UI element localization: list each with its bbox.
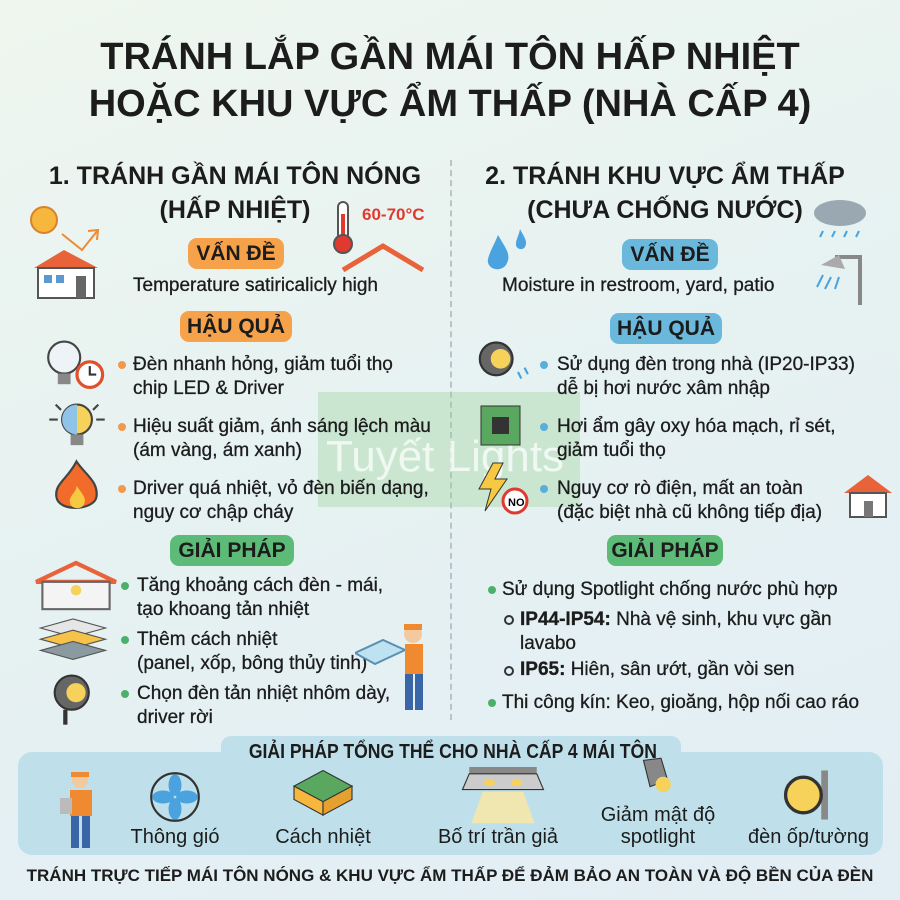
panel: right damp [478, 162, 892, 713]
item: insulation [275, 770, 371, 848]
panel heading tab [221, 736, 681, 768]
item: false ceiling: Bố trí trần giả [438, 826, 558, 848]
item: fewer spotlights: spotlight [621, 826, 695, 848]
solutions list: driver rời [137, 707, 213, 728]
consequences list [478, 341, 892, 523]
pill: hau qua: HẬU QUẢ [617, 317, 715, 340]
panel: left heat: (HẤP NHIỆT) [160, 196, 310, 224]
item: false ceiling [438, 767, 558, 848]
solutions list: IP65: Hiên, sân ướt, gần vòi sen [520, 659, 794, 680]
item: fewer spotlights [601, 758, 715, 848]
consequences list: (ám vàng, ám xanh) [133, 440, 302, 461]
pill: van de: VẤN ĐỀ [196, 242, 276, 265]
solutions list: Sử dụng Spotlight chống nước phù hợp [502, 579, 838, 600]
solutions list: lavabo [520, 633, 576, 654]
item: ventilation: Thông gió [131, 826, 219, 848]
solutions list [35, 560, 423, 728]
problem text: Moisture in restroom, yard, patio [502, 275, 774, 296]
consequences list: Nguy cơ rò điện, mất an toàn [557, 478, 803, 499]
item: fewer spotlights: Giảm mật độ [601, 804, 715, 826]
consequences list: giảm tuổi thọ [557, 440, 666, 461]
solutions list: Chọn đèn tản nhiệt nhôm dày, [137, 683, 390, 704]
pill: giai phap [170, 535, 294, 566]
consequences list [47, 340, 431, 523]
item: wall lights: đèn ốp/tường [748, 826, 869, 848]
solutions list [488, 579, 859, 713]
title: TRÁNH LẮP GẦN MÁI TÔN HẤP NHIỆT [100, 36, 800, 78]
watermark [318, 392, 580, 507]
watermark: Tuyết Lights [326, 432, 564, 481]
consequences list: Driver quá nhiệt, vỏ đèn biến dạng, [133, 478, 429, 499]
icon: water drops [488, 229, 526, 270]
consequences list: dễ bị hơi nước xâm nhập [557, 378, 770, 399]
consequences list: NO [508, 497, 525, 509]
panel: left heat [30, 161, 431, 728]
icon: worker [60, 772, 92, 848]
right heading: 2. TRÁNH KHU VỰC ẨM THẤP [485, 162, 845, 190]
icon: sun and house [30, 206, 100, 299]
solutions list: Thi công kín: Keo, gioăng, hộp nối cao ráo [502, 692, 859, 713]
item: wall lights [748, 770, 869, 848]
solutions list: (panel, xốp, bông thủy tinh) [137, 653, 367, 674]
consequences list: nguy cơ chập cháy [133, 502, 293, 523]
pill: van de [622, 239, 718, 270]
pill: hau qua [180, 311, 292, 342]
consequences list: Hiệu suất giảm, ánh sáng lệch màu [133, 416, 431, 437]
pill: hau qua: HẬU QUẢ [187, 315, 285, 338]
panel heading tab: GIẢI PHÁP TỔNG THỂ CHO NHÀ CẤP 4 MÁI TÔN [249, 741, 657, 763]
consequences list: Đèn nhanh hỏng, giảm tuổi thọ [133, 354, 393, 375]
left heading: 1. TRÁNH GẦN MÁI TÔN NÓNG [49, 162, 421, 190]
title [89, 34, 811, 125]
icon: worker with panel [355, 624, 423, 710]
consequences list: (đặc biệt nhà cũ không tiếp địa) [557, 502, 822, 523]
item: ventilation [130, 772, 219, 848]
panel: right damp: (CHƯA CHỐNG NƯỚC) [527, 196, 803, 224]
pill: hau qua [610, 313, 722, 344]
pill: giai phap [607, 535, 723, 566]
problem text: Temperature satiricalicly high [133, 275, 378, 296]
solutions list: IP44-IP54: Nhà vệ sinh, khu vực gần [520, 609, 832, 630]
pill: van de: VẤN ĐỀ [630, 243, 710, 266]
item: insulation: Cách nhiệt [275, 826, 371, 848]
pill: van de [188, 238, 284, 269]
solutions list: tạo khoang tản nhiệt [137, 599, 309, 620]
icon: rain cloud and shower [814, 200, 866, 305]
icon: thermometer and roof: 60-70°C [362, 205, 425, 224]
consequences list: Sử dụng đèn trong nhà (IP20-IP33) [557, 354, 855, 375]
solutions list: Thêm cách nhiệt [137, 629, 277, 650]
panel: overall solutions [18, 752, 883, 855]
icon: thermometer and roof [333, 201, 425, 272]
consequences list: Hơi ẩm gây oxy hóa mạch, rỉ sét, [557, 416, 836, 437]
pill: giai phap: GIẢI PHÁP [178, 539, 286, 562]
title: HOẶC KHU VỰC ẨM THẤP (NHÀ CẤP 4) [89, 83, 811, 125]
pill: giai phap: GIẢI PHÁP [611, 539, 719, 562]
solutions list: Tăng khoảng cách đèn - mái, [137, 575, 383, 596]
divider [450, 160, 452, 720]
consequences list: chip LED & Driver [133, 378, 284, 399]
footer text: TRÁNH TRỰC TIẾP MÁI TÔN NÓNG & KHU VỰC ẨM THẤP ĐỂ ĐẢM BẢO AN TOÀN VÀ ĐỘ BỀN CỦA ĐÈN [27, 866, 873, 885]
